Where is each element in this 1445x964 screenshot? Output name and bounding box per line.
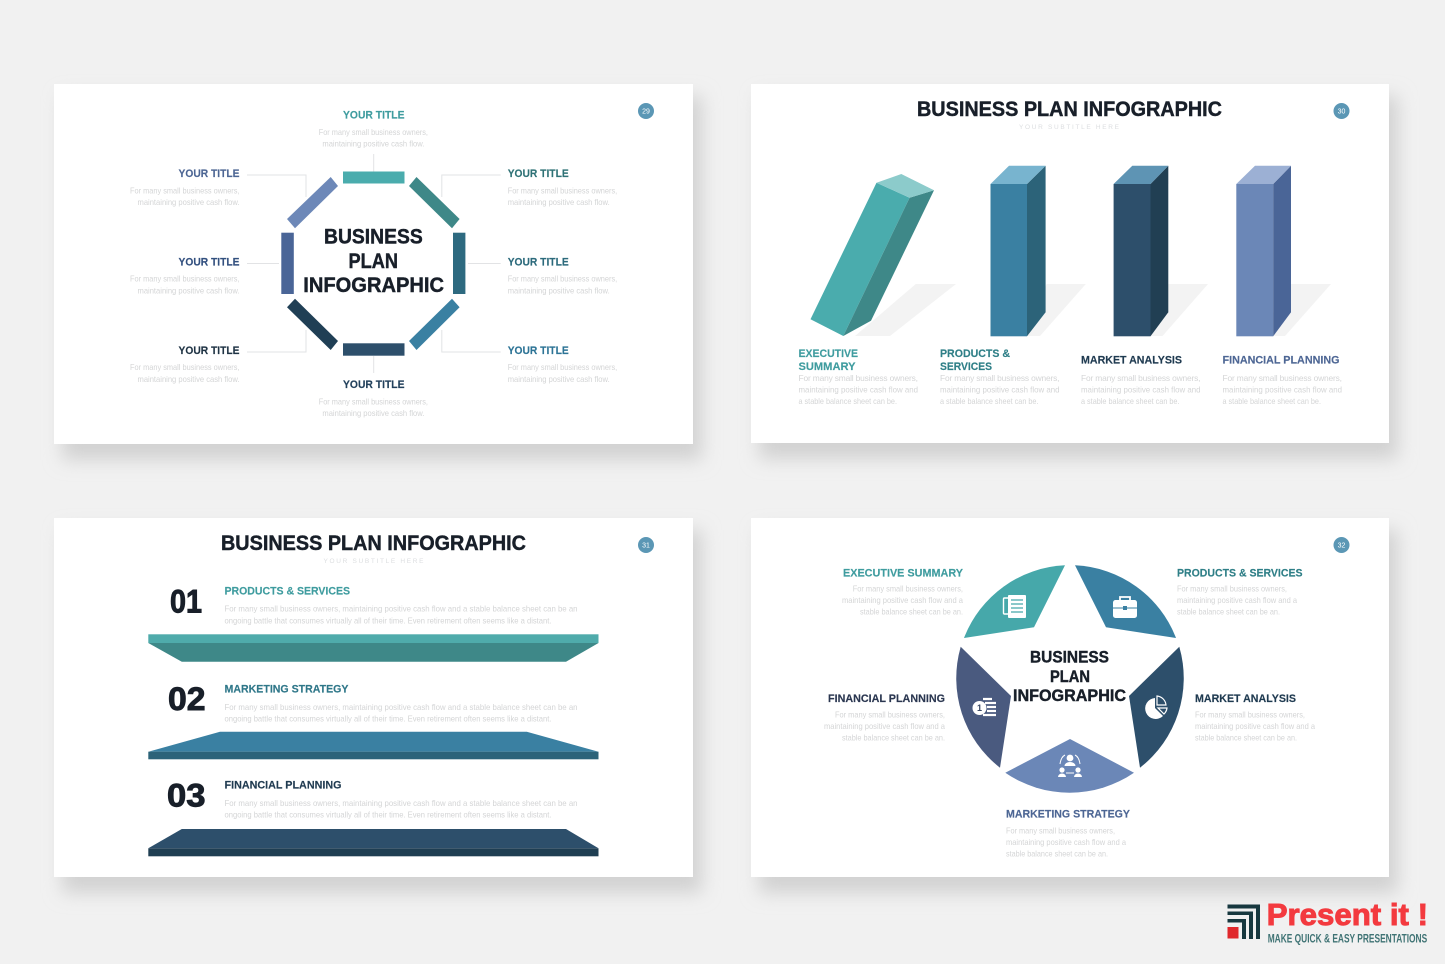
panel: star slide bbox=[751, 518, 1389, 877]
star center title bbox=[1013, 647, 1126, 705]
text block: executive summary: stable balance sheet can be an. bbox=[860, 606, 963, 616]
item 03 text bbox=[167, 778, 578, 820]
text block: financial planning: For many small business owners, bbox=[835, 710, 945, 720]
item 02 text bbox=[168, 681, 578, 723]
text block: upper right: For many small business owners, bbox=[508, 186, 617, 196]
item 01 text: 01 bbox=[170, 584, 202, 620]
3D bar: products and services bbox=[990, 166, 1086, 336]
text block: marketing strategy: stable balance sheet can be an. bbox=[1006, 848, 1108, 858]
octagon center title: PLAN bbox=[348, 250, 398, 273]
text block: middle right bbox=[508, 256, 617, 295]
text block: lower right: YOUR TITLE bbox=[508, 345, 569, 357]
slide subtitle: YOUR SUBTITLE HERE bbox=[324, 558, 424, 565]
3D bar: executive summary (leaning) bbox=[810, 174, 956, 336]
text block: top bbox=[319, 109, 428, 149]
text block: financial planning: FINANCIAL PLANNING bbox=[1222, 354, 1340, 366]
text block: products and services: PRODUCTS & SERVICES bbox=[1177, 568, 1302, 580]
text block: products and services: maintaining positive cash flow and bbox=[940, 384, 1060, 394]
text block: lower left: maintaining positive cash flow. bbox=[138, 374, 240, 384]
text block: market analysis: MARKET ANALYSIS bbox=[1195, 693, 1296, 705]
text block: middle right: For many small business owners, bbox=[508, 274, 617, 284]
star center title: PLAN bbox=[1050, 667, 1090, 686]
page number badge 31: 31 bbox=[642, 542, 650, 550]
text block: marketing strategy: MARKETING STRATEGY bbox=[1006, 808, 1131, 820]
text block: executive summary: EXECUTIVE SUMMARY bbox=[843, 568, 964, 580]
item 03 text: For many small business owners, maintaining positive cash flow and a stable balance sheet can be an bbox=[224, 798, 578, 808]
logo mark bbox=[1228, 904, 1260, 939]
text block: middle left: YOUR TITLE bbox=[178, 256, 240, 268]
text block: market analysis: maintaining positive cash flow and a bbox=[1195, 721, 1315, 731]
text block: upper left bbox=[130, 168, 240, 207]
item 02 text: MARKETING STRATEGY bbox=[224, 684, 349, 696]
octagon ring chart bbox=[281, 172, 465, 356]
octagon center title bbox=[303, 225, 444, 297]
text block: products and services bbox=[940, 348, 1060, 406]
text block: lower left: For many small business owners, bbox=[130, 362, 240, 372]
octagon center title: BUSINESS bbox=[324, 225, 423, 248]
page number badge 30: 30 bbox=[1338, 108, 1345, 116]
text block: market analysis: stable balance sheet can be an. bbox=[1195, 732, 1297, 742]
item 01 text: ongoing battle that consumes virtually all of their time. Even retirement often seems like a distant. bbox=[224, 615, 552, 625]
text block: products and services bbox=[1177, 568, 1302, 616]
text block: upper left: maintaining positive cash flow. bbox=[138, 197, 240, 207]
text block: executive summary: a stable balance sheet can be. bbox=[798, 396, 897, 406]
slide subtitle: YOUR SUBTITLE HERE bbox=[1019, 124, 1120, 131]
3D bar: market analysis bbox=[1114, 166, 1208, 336]
text block: executive summary: For many small business owners, bbox=[853, 584, 963, 594]
text block: lower left bbox=[130, 345, 240, 384]
page number badge 32 bbox=[1334, 537, 1350, 553]
text block: financial planning: maintaining positive cash flow and a bbox=[824, 721, 945, 731]
text block: market analysis: a stable balance sheet can be. bbox=[1081, 396, 1180, 406]
text block: marketing strategy: maintaining positive cash flow and a bbox=[1006, 837, 1126, 847]
text block: upper right: maintaining positive cash flow. bbox=[508, 197, 610, 207]
text block: financial planning: FINANCIAL PLANNING bbox=[828, 693, 945, 705]
text block: middle left: maintaining positive cash flow. bbox=[138, 285, 240, 295]
text block: financial planning: stable balance sheet can be an. bbox=[842, 732, 945, 742]
text block: lower right: maintaining positive cash flow. bbox=[508, 374, 610, 384]
text block: executive summary: EXECUTIVE bbox=[798, 348, 858, 360]
text block: financial planning: maintaining positive cash flow and bbox=[1222, 384, 1342, 394]
text block: market analysis: maintaining positive cash flow and bbox=[1081, 384, 1201, 394]
text block: lower right bbox=[508, 345, 617, 384]
page number badge 29: 29 bbox=[642, 108, 650, 116]
text block: lower left: YOUR TITLE bbox=[178, 345, 240, 357]
text block: top: For many small business owners, bbox=[319, 127, 428, 137]
text block: products and services: maintaining positive cash flow and a bbox=[1177, 595, 1297, 605]
text block: executive summary bbox=[798, 348, 918, 406]
text block: upper left: YOUR TITLE bbox=[178, 168, 240, 180]
text block: financial planning bbox=[824, 693, 945, 742]
star segment: products and services with briefcase icon bbox=[1075, 565, 1176, 638]
text block: executive summary: maintaining positive cash flow and bbox=[798, 384, 918, 394]
text block: bottom: maintaining positive cash flow. bbox=[322, 408, 424, 418]
text block: marketing strategy: For many small business owners, bbox=[1006, 826, 1115, 836]
logo wordmark: Present it ! bbox=[1267, 897, 1428, 932]
text block: middle left: For many small business owners, bbox=[130, 274, 240, 284]
text block: upper left: For many small business owners, bbox=[130, 186, 240, 196]
text block: products and services: SERVICES bbox=[940, 361, 992, 373]
page number badge 29 bbox=[638, 103, 654, 119]
text block: marketing strategy bbox=[1006, 808, 1131, 858]
panel: numbered shelves slide bbox=[54, 518, 693, 877]
star segment: financial planning with coins icon bbox=[956, 647, 1011, 768]
text block: financial planning: a stable balance sheet can be. bbox=[1222, 396, 1321, 406]
item 01 text bbox=[170, 584, 578, 625]
text block: executive summary bbox=[842, 568, 964, 616]
text block: upper right: YOUR TITLE bbox=[508, 168, 569, 180]
star segment: marketing strategy with team icon bbox=[1005, 739, 1134, 793]
logo: Present it bbox=[1228, 897, 1428, 946]
item 03 text: FINANCIAL PLANNING bbox=[224, 780, 342, 792]
text block: market analysis: For many small business owners, bbox=[1081, 373, 1200, 383]
text block: executive summary: maintaining positive cash flow and a bbox=[842, 595, 963, 605]
item 03 text: ongoing battle that consumes virtually all of their time. Even retirement often seems like a distant. bbox=[224, 810, 552, 820]
text block: financial planning: For many small business owners, bbox=[1222, 373, 1342, 383]
text block: products and services: stable balance sheet can be an. bbox=[1177, 606, 1280, 616]
star segment: executive summary with document icon bbox=[964, 565, 1065, 638]
text block: market analysis: For many small business owners, bbox=[1195, 710, 1305, 720]
panel: 3D bars slide bbox=[751, 84, 1389, 443]
shelf 3 bbox=[148, 829, 599, 856]
star segment: market analysis with pie chart icon bbox=[1129, 647, 1184, 768]
text block: executive summary: For many small business owners, bbox=[798, 373, 918, 383]
shelf 2 bbox=[148, 732, 599, 759]
star segment: financial planning with coins icon: 1 bbox=[977, 703, 982, 713]
shelf 1 bbox=[148, 634, 599, 662]
text block: market analysis: MARKET ANALYSIS bbox=[1081, 354, 1182, 366]
text block: products and services: For many small business owners, bbox=[1177, 584, 1287, 594]
star center title: BUSINESS bbox=[1030, 647, 1109, 666]
text block: lower right: For many small business owners, bbox=[508, 362, 617, 372]
3D bar: financial planning bbox=[1236, 166, 1331, 336]
text block: upper right bbox=[508, 168, 617, 207]
item 02 text: 02 bbox=[168, 681, 206, 717]
item 01 text: PRODUCTS & SERVICES bbox=[224, 586, 350, 598]
text block: top: maintaining positive cash flow. bbox=[322, 139, 424, 149]
text block: middle right: maintaining positive cash flow. bbox=[508, 285, 610, 295]
star center title: INFOGRAPHIC bbox=[1013, 686, 1126, 705]
text block: bottom: For many small business owners, bbox=[319, 396, 428, 406]
item 03 text: 03 bbox=[167, 778, 206, 814]
text block: bottom bbox=[319, 379, 428, 418]
octagon center title: INFOGRAPHIC bbox=[303, 274, 444, 297]
page number badge 32: 32 bbox=[1338, 542, 1345, 550]
text block: financial planning bbox=[1222, 354, 1342, 406]
connector lines bbox=[247, 154, 501, 373]
item 02 text: ongoing battle that consumes virtually all of their time. Even retirement often seems like a distant. bbox=[224, 713, 552, 723]
text block: middle left bbox=[130, 256, 240, 295]
text block: products and services: a stable balance sheet can be. bbox=[940, 396, 1038, 406]
slide title: BUSINESS PLAN INFOGRAPHIC bbox=[221, 532, 526, 555]
page number badge 31 bbox=[638, 537, 654, 553]
item 01 text: For many small business owners, maintaining positive cash flow and a stable balance sheet can be an bbox=[224, 604, 578, 614]
item 02 text: For many small business owners, maintaining positive cash flow and a stable balance sheet can be an bbox=[224, 702, 578, 712]
text block: top: YOUR TITLE bbox=[343, 109, 404, 121]
text block: executive summary: SUMMARY bbox=[798, 361, 856, 373]
text block: market analysis bbox=[1195, 693, 1315, 742]
text block: market analysis bbox=[1081, 354, 1201, 406]
text block: middle right: YOUR TITLE bbox=[508, 256, 569, 268]
text block: products and services: PRODUCTS & bbox=[940, 348, 1010, 360]
text block: bottom: YOUR TITLE bbox=[343, 379, 404, 391]
page number badge 30 bbox=[1334, 103, 1350, 119]
slide title: BUSINESS PLAN INFOGRAPHIC bbox=[917, 98, 1222, 121]
text block: products and services: For many small business owners, bbox=[940, 373, 1060, 383]
panel: octagon slide bbox=[54, 84, 693, 444]
